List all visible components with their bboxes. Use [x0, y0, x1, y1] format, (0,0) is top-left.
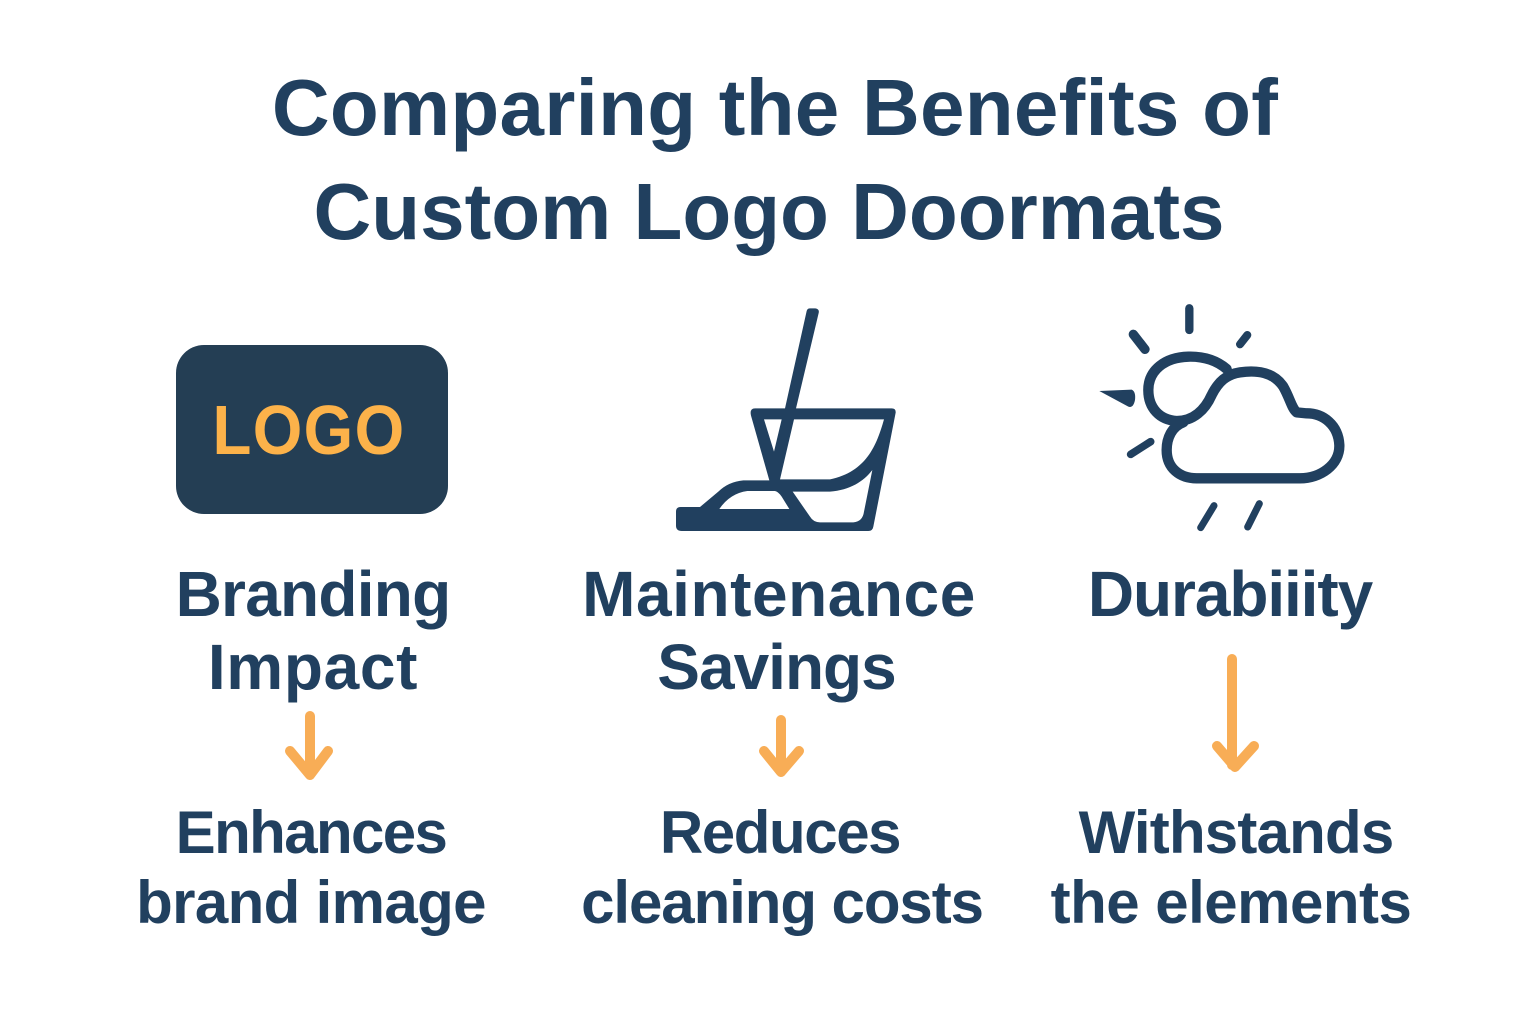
- text: withstands the elements: Withstands: [1079, 799, 1393, 866]
- arrow: durability: [1212, 654, 1259, 772]
- logo text: LOGO: [212, 391, 406, 469]
- icon: logo badge: [176, 345, 448, 514]
- text: enhances brand image: Enhances: [176, 799, 446, 866]
- icon: mop and bucket: [676, 308, 896, 531]
- text: reduces cleaning costs: [581, 799, 983, 936]
- text: enhances brand image: [136, 799, 486, 936]
- title: Custom Logo Doormats: [313, 167, 1225, 256]
- heading: branding impact: Impact: [208, 631, 418, 703]
- text: enhances brand image: brand image: [136, 869, 486, 936]
- arrow: branding: [285, 711, 333, 780]
- title: Comparing the Benefits of: [272, 63, 1278, 152]
- heading: maintenance savings: Savings: [657, 631, 896, 703]
- heading: branding impact: [176, 558, 450, 703]
- text: reduces cleaning costs: Reduces: [660, 799, 900, 866]
- text: withstands the elements: the elements: [1051, 869, 1411, 936]
- heading: maintenance savings: Maintenance: [582, 558, 976, 630]
- heading: branding impact: Branding: [176, 558, 450, 630]
- text: withstands the elements: [1051, 799, 1411, 936]
- arrow: maintenance: [759, 715, 804, 777]
- heading: maintenance savings: [582, 558, 976, 703]
- text: reduces cleaning costs: cleaning costs: [581, 869, 983, 936]
- icon: sun and rain cloud: [1100, 304, 1344, 532]
- heading: durability: Durabiiity: [1088, 558, 1372, 630]
- title: [272, 63, 1278, 256]
